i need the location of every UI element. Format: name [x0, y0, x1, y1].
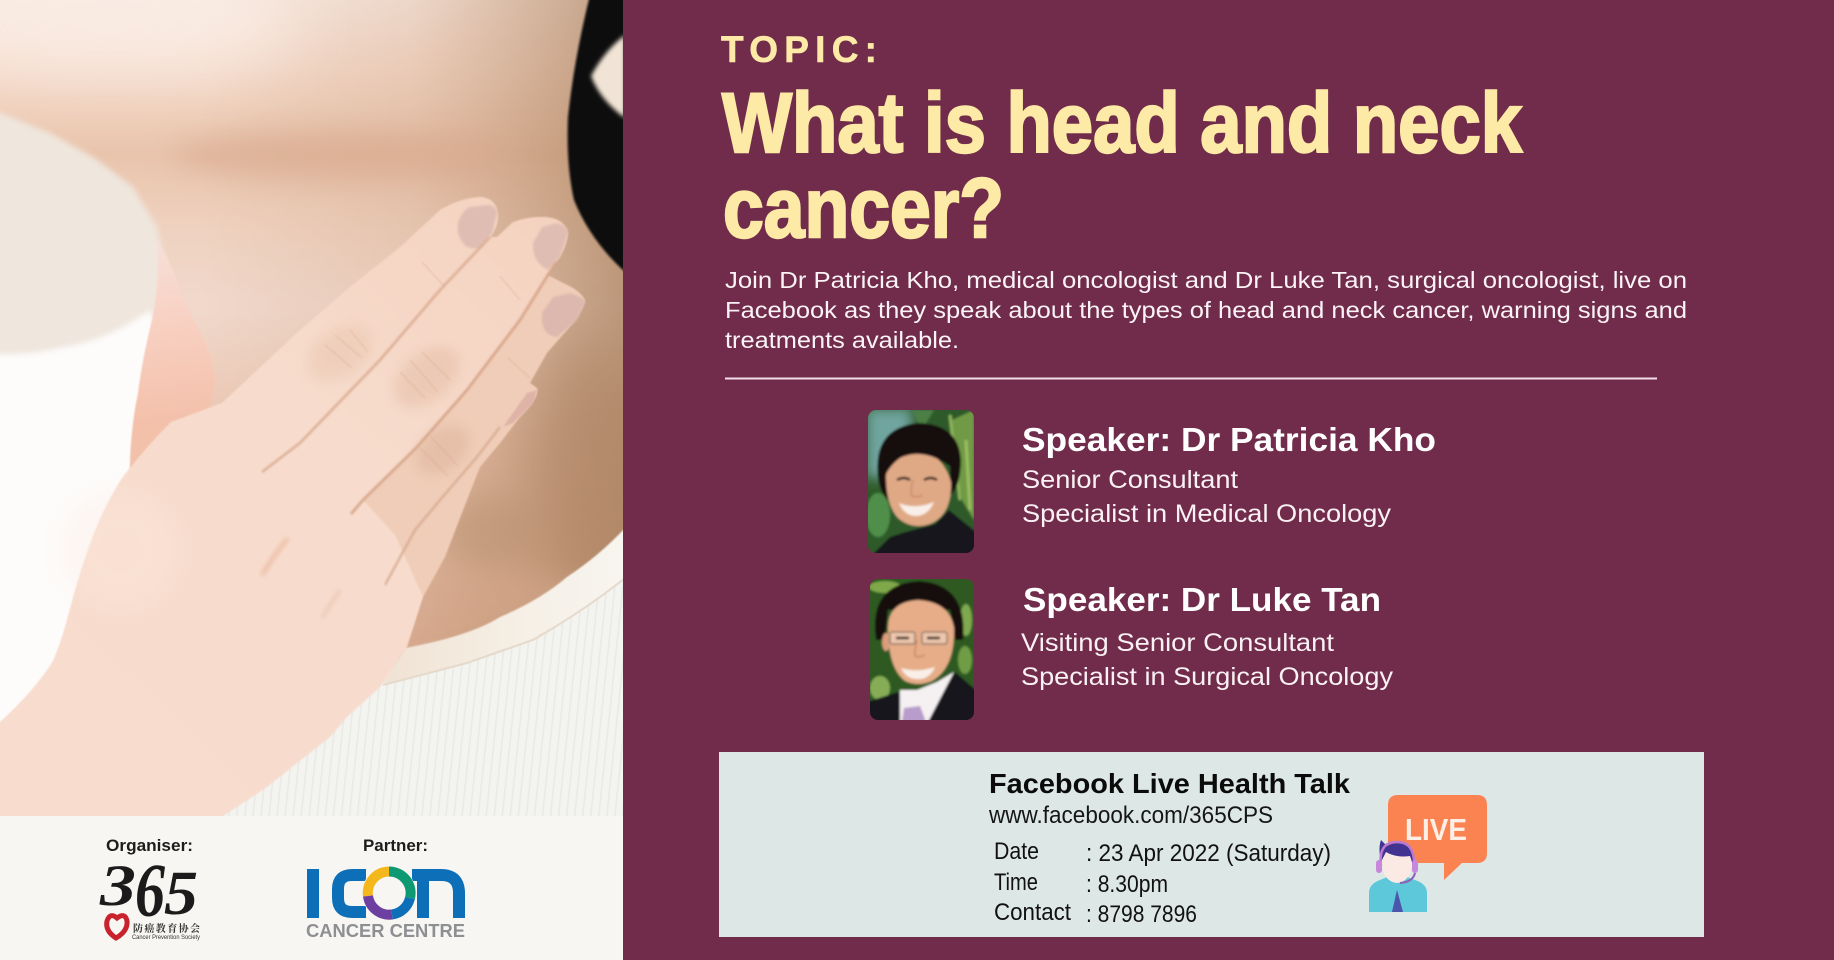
- event heading: Facebook Live Health Talk: [989, 768, 1350, 799]
- portrait: Dr Patricia Kho: [866, 408, 976, 556]
- logo: 365 Cancer Prevention Society: [99, 849, 201, 941]
- logo: 365 Cancer Prevention Society: 5: [164, 860, 198, 928]
- nails: [458, 205, 497, 248]
- ring and little fingers: [364, 276, 586, 597]
- event contact: : 8798 7896: [1086, 901, 1197, 928]
- portrait: Dr Luke Tan: [866, 577, 976, 722]
- title: What is head and neck: [722, 76, 1522, 170]
- intro text: Join Dr Patricia Kho, medical oncologist and Dr Luke Tan, surgical oncologist, live on: [725, 267, 1687, 293]
- speaker 2 details: Specialist in Surgical Oncology: [1021, 663, 1394, 691]
- shirt and collar: [223, 581, 623, 816]
- hair and mask: [568, 0, 625, 272]
- photo: hand on neck: [0, 0, 650, 830]
- event date: : 23 Apr 2022 (Saturday): [1086, 840, 1331, 867]
- event contact: Contact: [994, 899, 1071, 926]
- event contact: [994, 899, 1197, 928]
- hand: [0, 197, 568, 818]
- event date: Date: [994, 838, 1039, 865]
- label: organiser: Organiser:: [106, 836, 193, 855]
- event time: Time: [994, 869, 1038, 896]
- knuckles: [310, 328, 370, 380]
- logo: ICON Cancer Centre: CANCER CENTRE: [306, 921, 465, 941]
- speaker 1 details: Specialist in Medical Oncology: [1022, 500, 1392, 528]
- logo: ICON Cancer Centre: [306, 866, 465, 941]
- speaker 2 details: Visiting Senior Consultant: [1021, 629, 1334, 657]
- event date: [994, 838, 1331, 867]
- speaker 1 details: [1022, 421, 1436, 528]
- speaker 2 details: Speaker: Dr Luke Tan: [1023, 581, 1381, 618]
- logo: 365 Cancer Prevention Society: 3: [99, 853, 136, 918]
- intro text: Facebook as they speak about the types of head and neck cancer, warning signs and: [725, 297, 1687, 323]
- event time: [994, 869, 1168, 898]
- icon: presenter with headset: [1369, 840, 1427, 912]
- icon: live speech bubble: [1388, 795, 1487, 880]
- label: partner: Partner:: [363, 836, 428, 855]
- event url: www.facebook.com/365CPS: [988, 802, 1273, 829]
- logo: 365 Cancer Prevention Society: Cancer Prevention Society: [132, 934, 201, 941]
- title: [722, 76, 1522, 255]
- panel: Facebook Live details: [719, 752, 1704, 937]
- event time: : 8.30pm: [1086, 871, 1168, 898]
- heading: topic label: TOPIC:: [721, 29, 877, 70]
- logo: 365 Cancer Prevention Society: 防癌教育协会: [133, 920, 200, 935]
- thumb: [129, 252, 214, 469]
- logo: 365 Cancer Prevention Society: 6: [135, 849, 165, 933]
- intro text: treatments available.: [725, 327, 959, 353]
- panel: organiser and partner strip: [0, 816, 623, 960]
- speaker 1 details: Speaker: Dr Patricia Kho: [1022, 421, 1436, 458]
- speaker 1 details: Senior Consultant: [1022, 466, 1238, 494]
- intro text: [725, 267, 1687, 353]
- icon: live speech bubble: LIVE: [1405, 812, 1467, 847]
- speaker 2 details: [1021, 581, 1394, 691]
- title: cancer?: [723, 161, 1004, 255]
- finger gaps: [262, 237, 490, 472]
- hand tendon marks: [262, 538, 288, 575]
